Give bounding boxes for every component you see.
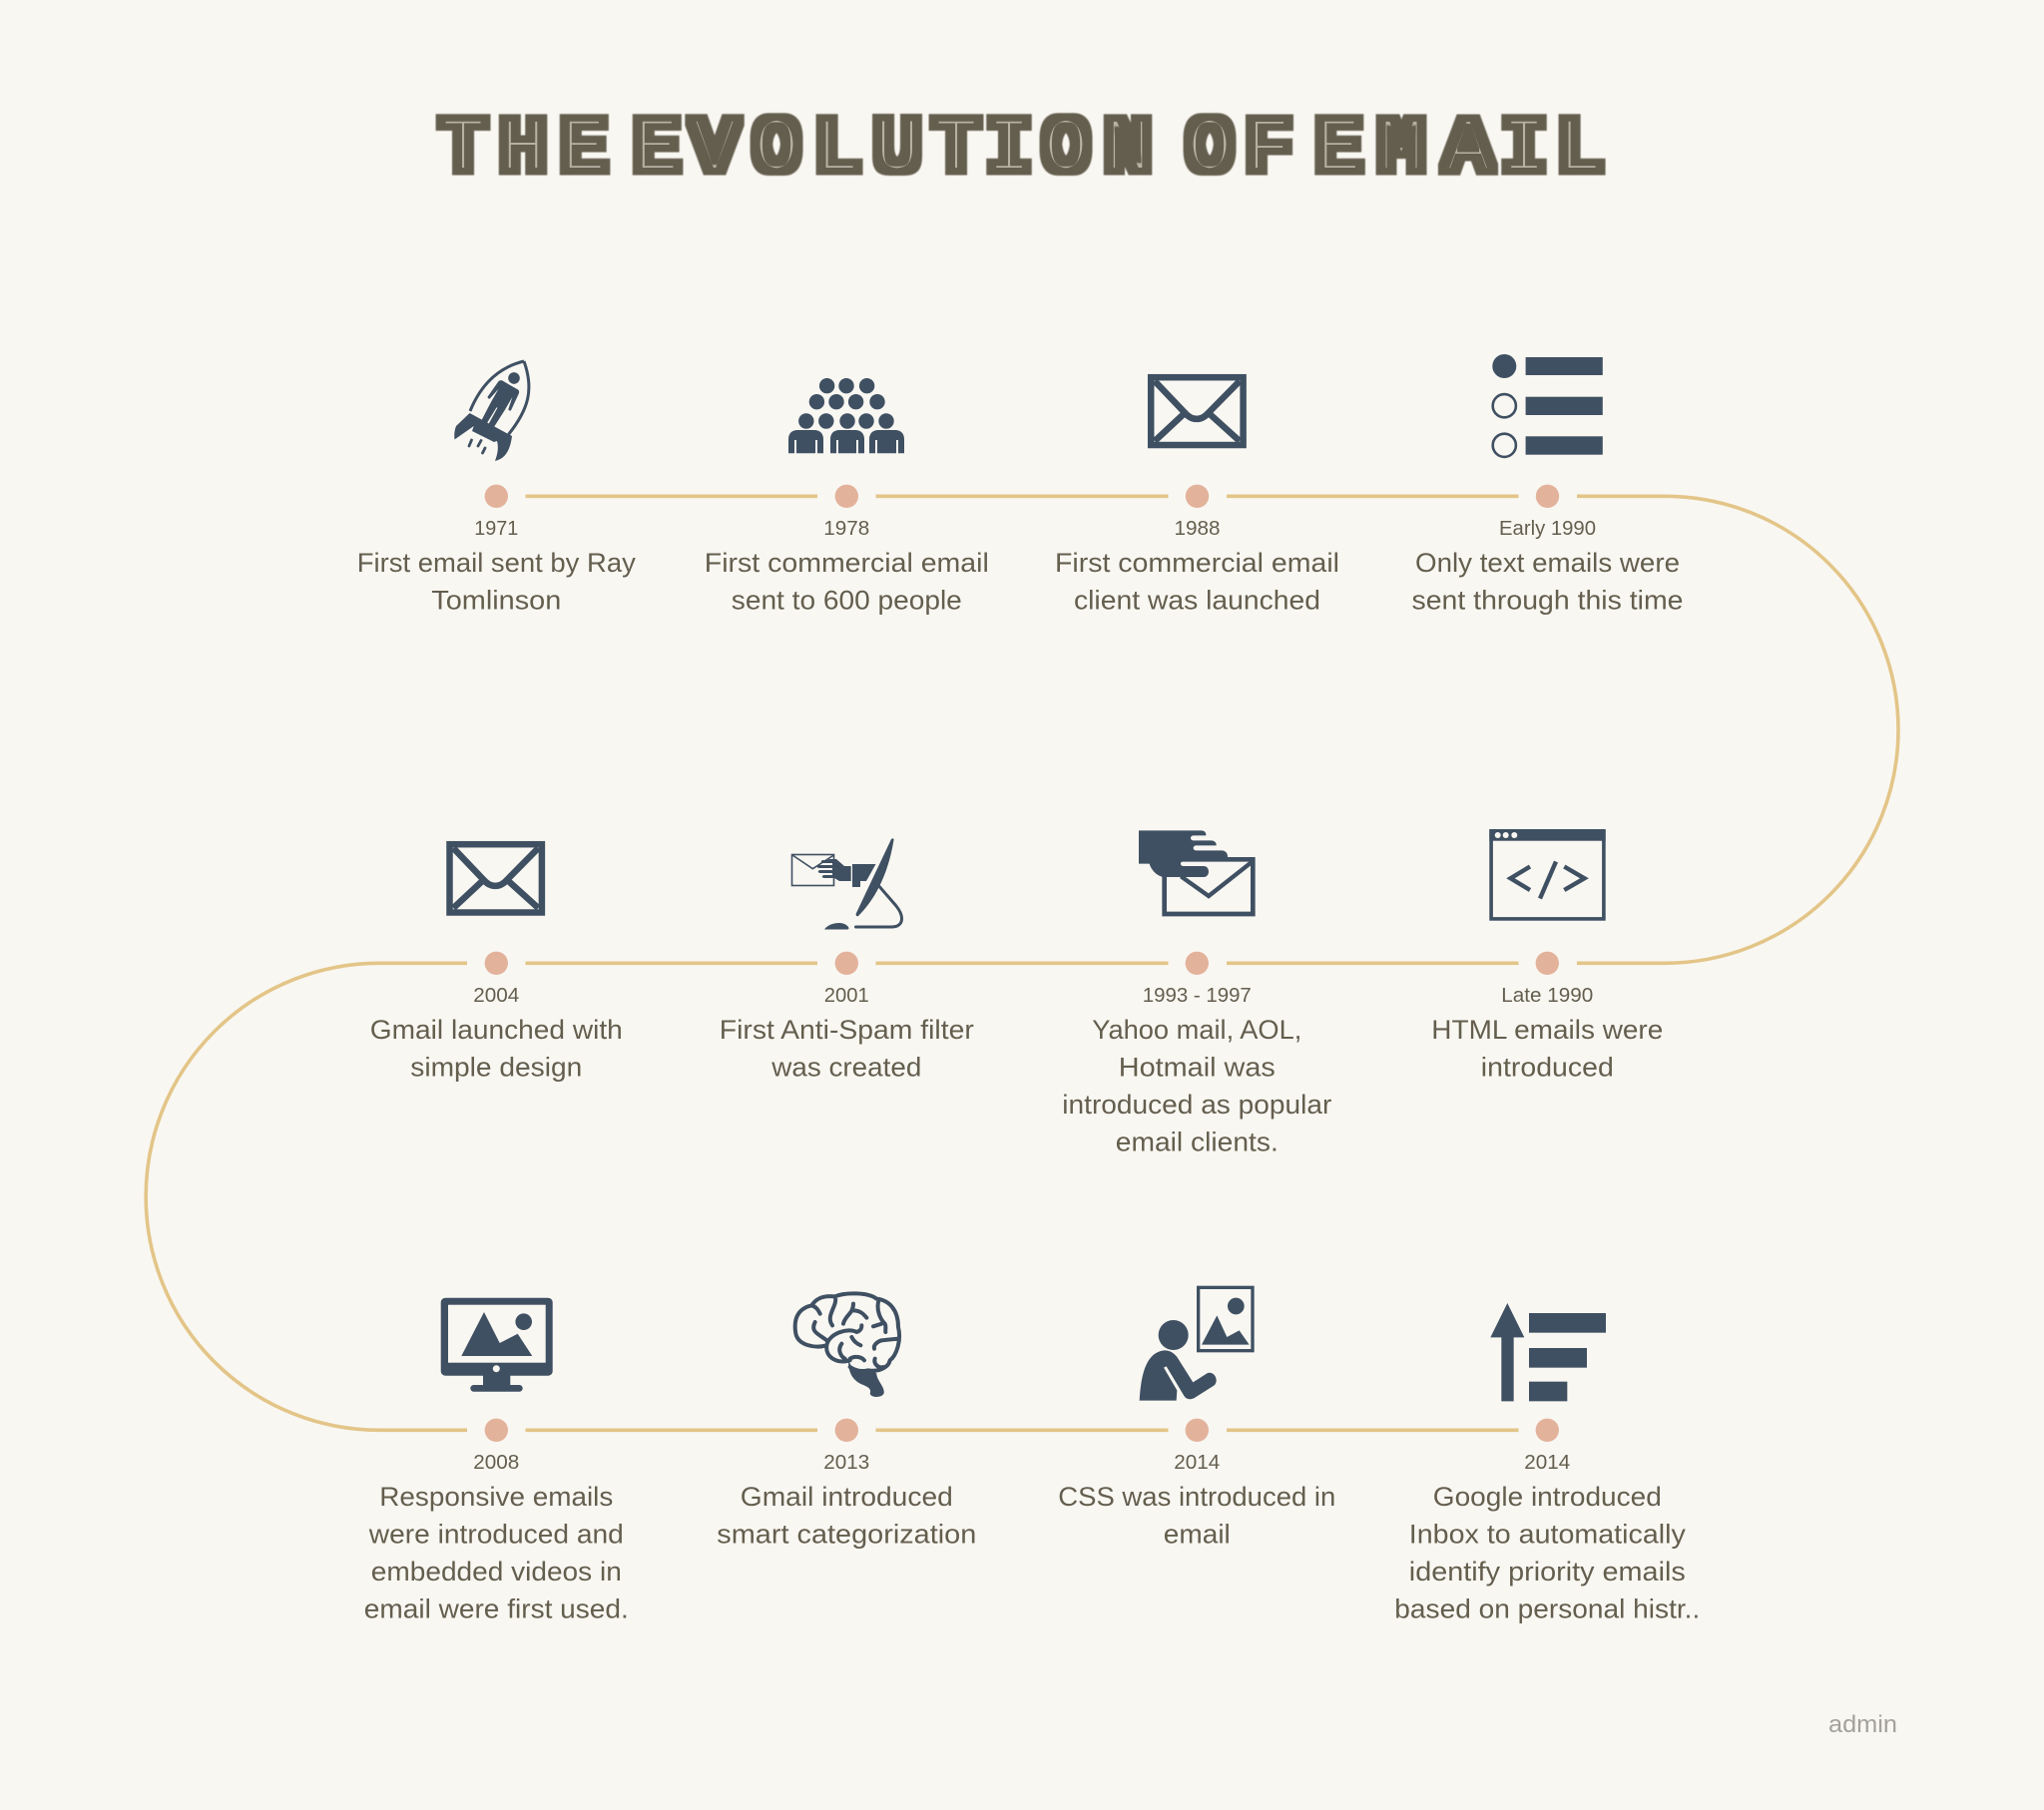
year: 2008 [473,1451,519,1474]
description: Gmail introduced [741,1482,953,1512]
milestone: Early 1990 [1411,354,1683,615]
icon: envelope [449,844,542,912]
dot [1536,1419,1559,1442]
description [364,1482,629,1624]
description: Gmail launched with [370,1015,623,1045]
milestone: 1993 - 1997 [1062,830,1331,1157]
dot [1186,485,1209,508]
author credit: admin [1828,1711,1897,1738]
icon: rocket with person [454,361,529,461]
year: 1971 [474,517,518,540]
year: 1978 [823,517,869,540]
description: First commercial email [1055,548,1339,578]
icon: person pointing at picture [1140,1287,1253,1401]
icon: envelope [1151,377,1244,445]
milestone: 2008 [364,1298,629,1624]
dot [835,485,858,508]
milestone: 2014 Inbox [1394,1303,1700,1624]
description: Responsive emails [379,1482,613,1512]
description: HTML emails were [1431,1015,1663,1045]
description: sent through this time [1411,585,1683,615]
description: client was launched [1074,585,1320,615]
icon: anti-spam computer [792,838,901,930]
icon: crowd of people [788,378,904,453]
dot [835,952,858,975]
dot [1536,952,1559,975]
description [720,1015,974,1082]
milestone: 2004 [370,844,623,1082]
year: 2014 [1174,1451,1220,1474]
description [370,1015,623,1082]
description: were introduced and [368,1519,624,1549]
dot [1536,485,1559,508]
description: First commercial email [705,548,989,578]
description: First email sent by Ray [357,548,636,578]
description [705,548,989,615]
milestone: 1978 [705,378,989,615]
year: 1993 - 1997 [1143,984,1252,1007]
milestone: 1988 [1055,377,1339,615]
description: simple design [410,1052,582,1082]
icon: monitor with image [441,1298,553,1392]
milestone: 2014 CSS [1058,1287,1335,1549]
description: Inbox to automatically [1409,1519,1686,1549]
icon: hand with envelope [1139,830,1253,914]
icon: code window [1489,829,1606,919]
description: Hotmail was [1119,1052,1276,1082]
description: introduced as popular [1062,1090,1331,1120]
dot [485,485,508,508]
milestone: 2001 [720,838,974,1082]
description: embedded videos in [371,1557,622,1586]
description [1062,1015,1331,1157]
dot [835,1419,858,1442]
year: 2013 [823,1451,869,1474]
icon: priority arrow and bars [1490,1303,1606,1401]
description: was created [770,1052,921,1082]
milestone: Late 1990 [1431,829,1663,1082]
dot [1186,1419,1209,1442]
description: CSS was introduced in [1058,1482,1335,1512]
description [1055,548,1339,615]
description: sent to 600 people [732,585,962,615]
icon: text list [1492,354,1603,457]
description [1431,1015,1663,1082]
year: Late 1990 [1501,984,1593,1007]
description [717,1482,976,1549]
description: introduced [1481,1052,1614,1082]
description [1411,548,1683,615]
year: 2014 [1524,1451,1570,1474]
description: email were first used. [364,1594,629,1624]
milestone: 1971 [357,361,636,615]
year: 2004 [473,984,519,1007]
description: Yahoo mail, AOL, [1092,1015,1301,1045]
description: identify priority emails [1409,1557,1686,1586]
description [1394,1482,1700,1624]
dot [1186,952,1209,975]
dot [485,952,508,975]
description [1058,1482,1335,1549]
description: Only text emails were [1415,548,1680,578]
title: THE EVOLUTION OF EMAIL [440,107,1603,193]
icon: brain [795,1293,899,1397]
description: smart categorization [717,1519,976,1549]
year: 1988 [1174,517,1220,540]
description: email clients. [1116,1128,1278,1157]
description: email [1164,1519,1231,1549]
year: Early 1990 [1499,517,1596,540]
description: Google introduced [1433,1482,1662,1512]
dot [485,1419,508,1442]
description: Tomlinson [431,585,561,615]
description: First Anti-Spam filter [720,1015,974,1045]
timeline path [146,496,1898,1430]
description [357,548,636,615]
description: based on personal histr.. [1394,1594,1700,1624]
milestone: 2013 [717,1293,976,1549]
year: 2001 [824,984,869,1007]
